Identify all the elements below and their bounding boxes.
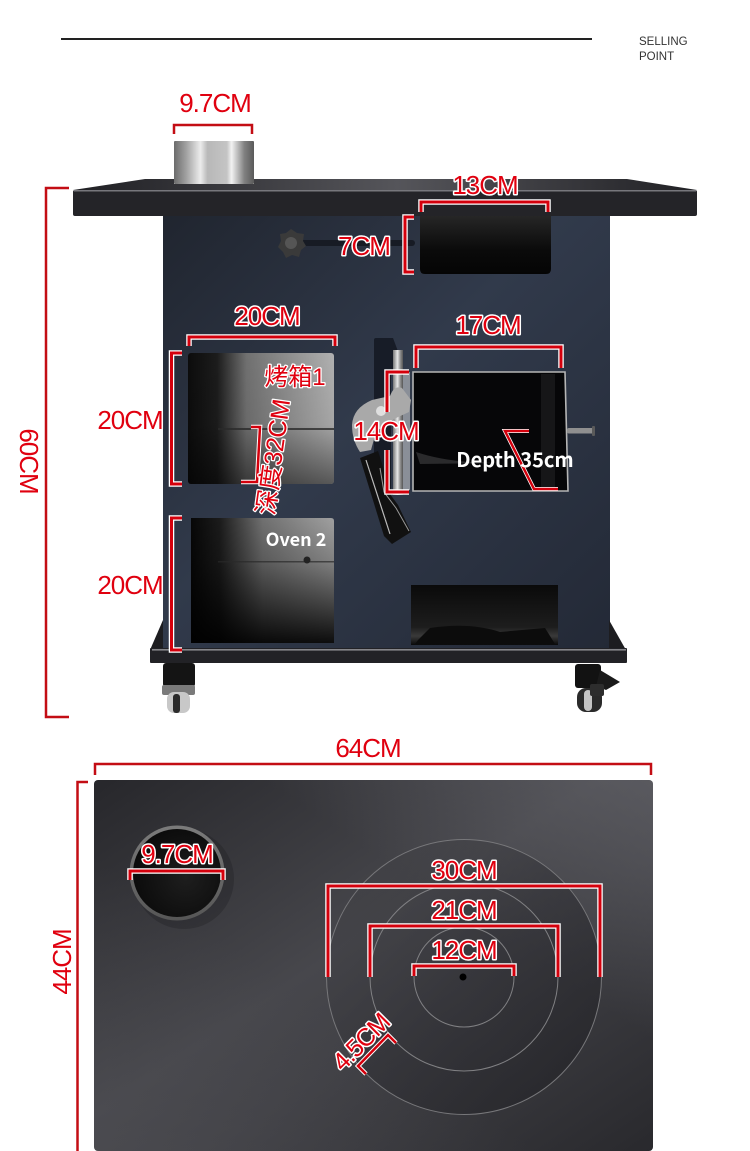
dimension: opening 13CM [421, 170, 548, 212]
stove front view [73, 141, 697, 713]
chimney collar [174, 141, 254, 184]
dimension: ring 30CM: 30CM [431, 855, 497, 885]
dimension: ring 21CM: 21CM [431, 895, 497, 925]
flue hole [130, 826, 234, 929]
dimension: firebox depth 35cm [456, 431, 574, 489]
dimension: oven 2 height 20CM: 20CM [97, 570, 163, 600]
header rule [61, 38, 592, 40]
bracket: chimney width [174, 125, 252, 134]
bracket: top width [95, 764, 651, 775]
label: oven 2: Oven 2 [266, 526, 326, 552]
dimension: firebox height 14CM: 14CM [353, 416, 419, 446]
dimension: oven width 20CM [189, 301, 335, 346]
dimension: firebox width 17CM: 17CM [455, 310, 521, 340]
stove body [163, 214, 610, 652]
dimension: ring 30CM [328, 855, 600, 977]
concentric burner rings [326, 840, 602, 1114]
right caster [575, 664, 620, 712]
dimension: opening 7CM [338, 217, 414, 272]
bracket: top depth [78, 782, 88, 1151]
dimension: firebox depth 35cm: Depth 35cm [456, 444, 574, 473]
dimension: ring 21CM [370, 895, 558, 977]
oven 2 [191, 518, 334, 643]
dimension: firebox width 17CM [416, 310, 561, 368]
label: 64CM: 64CM [335, 733, 401, 763]
label: oven 1: 烤箱1 [264, 364, 326, 391]
cooktop panel [94, 780, 653, 1151]
upper opening [420, 216, 551, 274]
base plate [150, 620, 627, 663]
dimension: ring gap 4.5CM: 4.5CM [327, 1008, 396, 1077]
dimension: firebox height 14CM [353, 372, 419, 492]
dimension: flue 9.7CM [130, 839, 223, 880]
dimension: oven 1 height 20CM [97, 353, 182, 484]
dimension: oven width 20CM: 20CM [234, 301, 300, 331]
ash pit opening [411, 585, 558, 645]
dimension: flue 9.7CM: 9.7CM [141, 839, 213, 869]
dimension: ring 12CM: 12CM [431, 935, 497, 965]
label: 60CM: 60CM [14, 428, 44, 494]
selling point label: POINT [639, 51, 674, 63]
label: 44CM: 44CM [47, 929, 77, 995]
dimension: oven depth 32CM: 深度32CM [252, 397, 296, 517]
door hinge and handle [352, 338, 411, 544]
top plate [73, 179, 697, 216]
dimension: opening 13CM: 13CM [452, 170, 518, 200]
dimension: opening 7CM: 7CM [338, 231, 390, 261]
dimension: oven 2 height 20CM [97, 518, 182, 650]
firebox door [413, 372, 595, 491]
oven 1 [188, 353, 334, 484]
left caster [162, 663, 195, 713]
damper knob and rod [278, 229, 415, 258]
dimension: ring 12CM [414, 935, 514, 976]
selling point label: SELLING [639, 36, 688, 48]
bracket: total height [46, 188, 69, 717]
label: chimney 9.7CM: 9.7CM [179, 88, 251, 118]
cooktop plan view [94, 780, 653, 1151]
dimension: oven 1 height 20CM: 20CM [97, 405, 163, 435]
centre hole [460, 974, 466, 980]
